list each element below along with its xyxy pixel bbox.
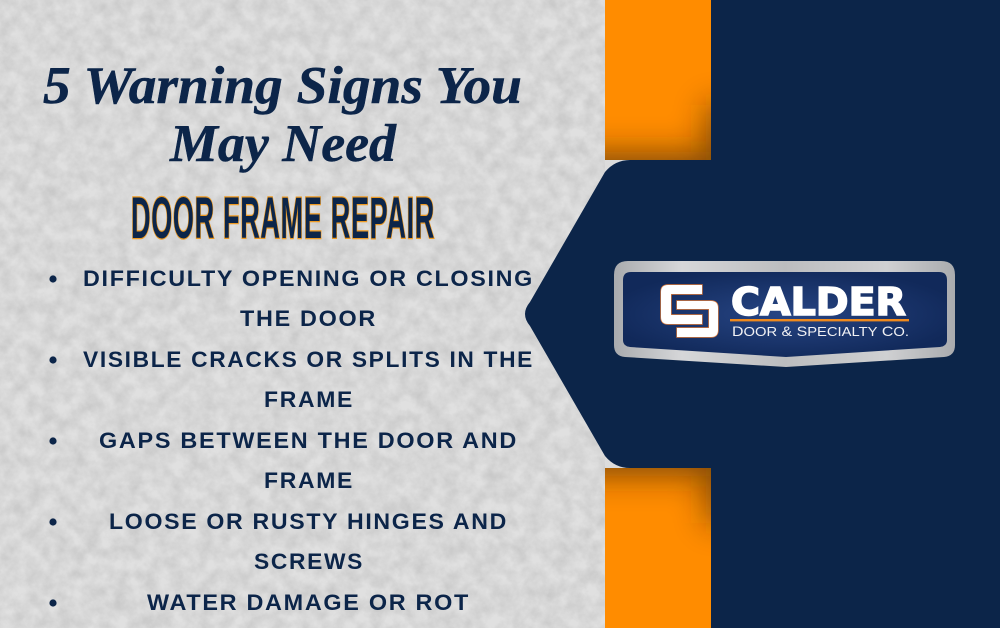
tagline: DOOR & S PECIALTY CO. — [732, 323, 909, 339]
item 1: DIFFICULTY OPENING OR CLOSING — [83, 266, 534, 291]
item 4: SCREWS — [254, 549, 364, 574]
panel: textured grey background — [0, 0, 605, 628]
icon: CS monogram — [661, 285, 718, 337]
item 2 — [49, 347, 534, 412]
item 2: VISIBLE CRACKS OR SPLITS IN THE — [83, 347, 534, 372]
title: May Need — [169, 115, 398, 173]
item 1 — [49, 266, 534, 331]
panel: orange bands with shadow — [605, 0, 711, 628]
item 3 — [49, 428, 518, 493]
panel: navy arrow shape — [525, 160, 712, 468]
item 5: WATER DAMAGE OR ROT — [147, 590, 470, 615]
title — [43, 57, 522, 173]
item 3: FRAME — [264, 468, 354, 493]
item 4: LOOSE OR RUSTY HINGES AND — [109, 509, 508, 534]
item 1: THE DOOR — [240, 306, 377, 331]
title: 5 Warning Signs You — [43, 57, 522, 115]
logo: Calder badge — [614, 261, 955, 367]
badge silver frame — [614, 261, 955, 367]
bullet list of warning signs — [49, 266, 534, 615]
item 2: FRAME — [264, 387, 354, 412]
panel: navy right block — [711, 0, 1000, 628]
orange rule — [730, 319, 909, 321]
text: DOOR FRAME REPAIR — [131, 186, 435, 251]
wordmark: CALDER — [731, 280, 906, 324]
item 3: GAPS BETWEEN THE DOOR AND — [99, 428, 518, 453]
item 4 — [49, 509, 508, 574]
badge blue inner — [623, 272, 947, 357]
